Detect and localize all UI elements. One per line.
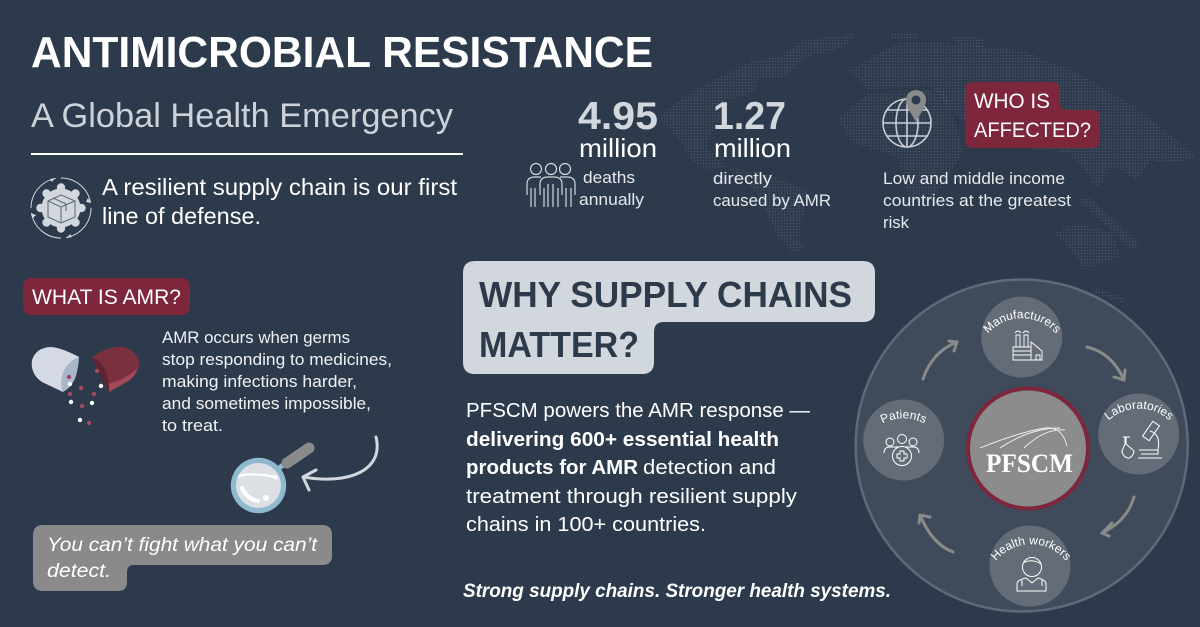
badge: who is affected: WHO IS bbox=[974, 89, 1050, 113]
center: PFSCM logo bbox=[968, 388, 1088, 508]
heading: why supply chains matter: MATTER? bbox=[479, 324, 639, 365]
badge: what is AMR bbox=[23, 278, 190, 315]
text: PFSCM response: detection and bbox=[643, 457, 776, 479]
heading: why supply chains matter bbox=[463, 261, 875, 374]
text: AMR definition: making infections harder, bbox=[162, 373, 357, 391]
badge: who is affected bbox=[965, 82, 1100, 148]
closing statement: Strong supply chains. Stronger health systems. bbox=[463, 581, 891, 602]
text: AMR definition: to treat. bbox=[162, 417, 223, 435]
node: patients: Patients bbox=[880, 410, 926, 423]
node: patients bbox=[863, 400, 944, 480]
tagline: resilient supply chain: line of defense. bbox=[102, 203, 261, 229]
text: low and middle income: risk bbox=[883, 214, 910, 232]
statistic: 4.95 million deaths: million bbox=[579, 133, 657, 163]
text: PFSCM response: delivering 600+ essential health bbox=[466, 429, 779, 451]
subtitle: A Global Health Emergency bbox=[31, 97, 453, 135]
statistic: 4.95 million deaths: deaths bbox=[583, 169, 635, 187]
icon: magnifying glass bbox=[231, 448, 309, 513]
text: PFSCM response: PFSCM powers the AMR response — bbox=[466, 400, 810, 422]
badge: who is affected: AFFECTED? bbox=[974, 118, 1091, 142]
icon: open capsule bbox=[32, 347, 139, 425]
statistic: 4.95 million deaths: annually bbox=[579, 191, 645, 209]
arrow: laboratories to health workers bbox=[1102, 497, 1134, 536]
statistic: 1.27 million directly caused: 1.27 bbox=[713, 95, 786, 138]
arrow: patients to manufacturers bbox=[923, 341, 957, 379]
statistic: 1.27 million directly caused: directly bbox=[713, 170, 773, 188]
statistic: 4.95 million deaths: 4.95 bbox=[578, 95, 658, 138]
text: PFSCM response: treatment through resilient supply bbox=[466, 486, 797, 508]
node: laboratories bbox=[1098, 394, 1180, 474]
tagline: resilient supply chain: A resilient supply chain is our first bbox=[102, 174, 457, 200]
callout: can't fight what you can't detect bbox=[33, 525, 332, 591]
statistic: 4.95 million deaths bbox=[578, 95, 658, 209]
arrow: manufacturers to laboratories bbox=[1087, 347, 1125, 380]
arrow: health workers to patients bbox=[919, 515, 953, 552]
heading: why supply chains matter: WHY SUPPLY CHAINS bbox=[479, 274, 852, 315]
callout: can't fight what you can't detect: detect. bbox=[47, 561, 111, 582]
statistic: 1.27 million directly caused: million bbox=[714, 133, 791, 163]
text: low and middle income: Low and middle income bbox=[883, 170, 1065, 188]
diagram: supply chain cycle bbox=[854, 278, 1189, 613]
text: PFSCM response: products for AMR bbox=[466, 457, 639, 479]
node: health workers: Health workers bbox=[990, 536, 1070, 560]
center: PFSCM logo: PFSCM bbox=[986, 449, 1073, 478]
text: AMR definition: stop responding to medicines, bbox=[162, 351, 392, 369]
node: health workers bbox=[990, 526, 1070, 606]
text: AMR definition: and sometimes impossible, bbox=[162, 395, 371, 413]
statistic: 1.27 million directly caused: caused by AMR bbox=[713, 192, 831, 210]
text: AMR definition bbox=[162, 329, 392, 435]
icon: globe with pin bbox=[883, 90, 931, 147]
text: PFSCM response: chains in 100+ countries. bbox=[466, 514, 706, 536]
node: manufacturers: Manufacturers bbox=[982, 310, 1060, 333]
badge: what is AMR: WHAT IS AMR? bbox=[32, 286, 181, 309]
icon: supply chain gear bbox=[31, 178, 91, 238]
dotted world map bbox=[657, 33, 1197, 303]
icon: people bbox=[527, 164, 575, 207]
callout: can't fight what you can't detect: You can’t fight what you can’t bbox=[47, 535, 318, 556]
statistic: 1.27 million directly caused bbox=[713, 95, 831, 210]
tagline: resilient supply chain bbox=[102, 174, 457, 229]
node: manufacturers bbox=[981, 296, 1062, 378]
arrow: to magnifying glass bbox=[303, 437, 377, 490]
node: laboratories: Laboratories bbox=[1104, 401, 1172, 420]
text: AMR definition: AMR occurs when germs bbox=[162, 329, 350, 347]
text: low and middle income: countries at the greatest bbox=[883, 192, 1071, 210]
text: PFSCM response bbox=[466, 400, 810, 536]
title: ANTIMICROBIAL RESISTANCE bbox=[31, 28, 653, 77]
text: low and middle income bbox=[883, 170, 1071, 232]
